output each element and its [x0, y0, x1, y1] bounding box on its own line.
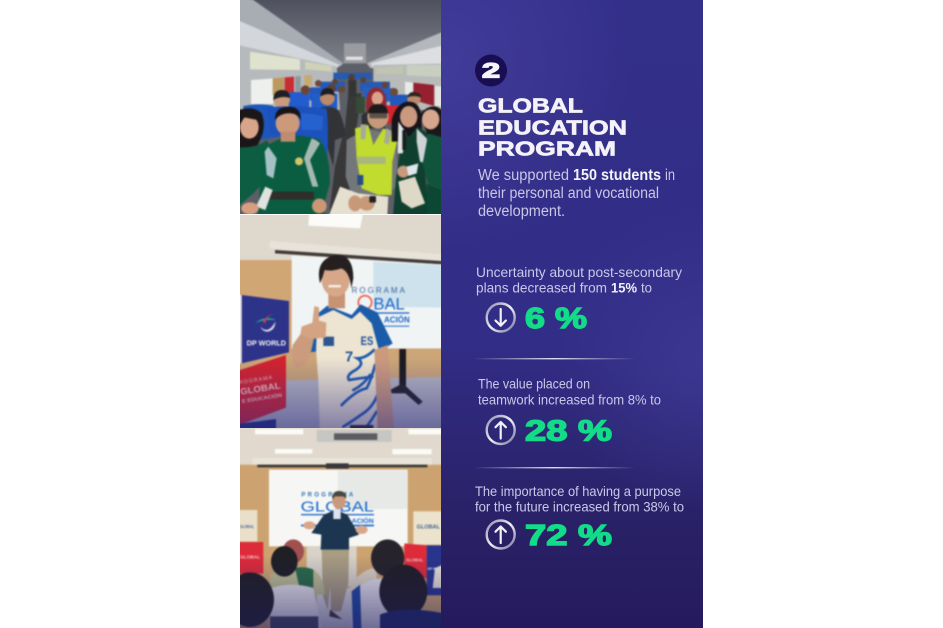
floor [316, 587, 353, 628]
photo: student giving a thumbs up: ROGRAMA [352, 286, 407, 295]
number badge: 2 [482, 60, 500, 82]
photo: student giving a thumbs up: ES [361, 334, 373, 348]
screen [269, 470, 408, 546]
stat value: 6 %: 6 % [525, 303, 587, 335]
far people [301, 85, 310, 95]
icon: down arrow [487, 304, 515, 332]
photo: students on a bus [240, 0, 441, 214]
photo: speaker presenting to students: GLOBAL [240, 555, 260, 561]
boy in cap [272, 96, 291, 108]
photo: student giving a thumbs up: BAL [373, 295, 405, 314]
stat value: 28 %: 28 % [525, 416, 612, 448]
photo: student giving a thumbs up: ROGRAMA [238, 375, 274, 386]
stat text: teamwork: teamwork increased from 8% to [478, 392, 661, 408]
red cube [240, 354, 287, 424]
photo: student giving a thumbs up: ACIÓN [384, 315, 410, 324]
stat text: uncertainty: 15% [611, 280, 638, 296]
wood wall [240, 259, 292, 380]
intro text: development. [478, 203, 565, 220]
icon: up arrow [487, 520, 515, 548]
screen [292, 256, 451, 348]
intro text: in [665, 167, 675, 184]
heading: EDUCATION [478, 116, 627, 140]
speaker [322, 550, 349, 611]
photo: speaker presenting to students: GLOBAL [240, 524, 254, 530]
photo: speaker presenting to students: GLOBAL [406, 557, 423, 562]
photo: speaker presenting to students [240, 428, 441, 628]
green jacket boy [257, 135, 330, 223]
photo: student giving a thumbs up: DP WORLD [247, 339, 286, 348]
heading: PROGRAM [478, 138, 616, 160]
stat value: 72 %: 72 % [525, 520, 612, 552]
stat text: uncertainty: Uncertainty about post-secondary [476, 264, 682, 280]
floor aisle [328, 93, 362, 220]
photo: speaker presenting to students: ACIÓN [352, 516, 374, 525]
stat text: uncertainty: plans decreased from [476, 280, 607, 296]
left girl [240, 107, 265, 148]
man in safety vest [346, 130, 399, 197]
stat text: purpose: for the future increased from 38% to [475, 498, 684, 514]
arm [292, 333, 314, 368]
intro text: their personal and vocational [478, 185, 659, 202]
stat text: uncertainty: to [641, 280, 652, 296]
red hair girl [366, 86, 388, 112]
boy in dark sweater [320, 91, 335, 105]
stat text: purpose: The importance of having a purpose [475, 483, 681, 499]
big blue seats [243, 104, 283, 143]
photo: student giving a thumbs up: 7 [345, 350, 353, 366]
head [328, 290, 345, 308]
heading: GLOBAL [478, 94, 583, 118]
icon: up arrow [487, 416, 515, 444]
photo: student giving a thumbs up: E EDUCACIÓN [241, 391, 283, 405]
intro text: We supported [478, 167, 569, 184]
far seats [333, 73, 372, 79]
stat text: teamwork [478, 376, 661, 408]
heading [478, 94, 627, 160]
tint [240, 364, 441, 428]
photo: speaker presenting to students: PROGRAMA [301, 492, 356, 498]
number badge [475, 54, 507, 86]
stat text: uncertainty [476, 264, 682, 296]
photo: speaker presenting to students: GLOBAL [301, 499, 374, 515]
photo: speaker presenting to students: GLOBAL [417, 525, 441, 531]
photo: speaker presenting to students: DP WOR [428, 566, 441, 571]
left signs [240, 509, 258, 542]
panel: purple background [441, 0, 703, 628]
intro text: 150 students [573, 167, 661, 184]
dp world cube [242, 295, 289, 363]
audience [283, 539, 304, 563]
photo: student giving a thumbs up: GLOBAL [240, 380, 282, 397]
right girls [392, 102, 422, 142]
student [315, 310, 378, 428]
intro text [478, 167, 675, 220]
floor [247, 376, 441, 428]
photo: student giving a thumbs up [240, 215, 441, 428]
right signs [412, 510, 441, 546]
stat text: teamwork: The value placed on [478, 376, 590, 392]
stat text: purpose [475, 483, 684, 514]
